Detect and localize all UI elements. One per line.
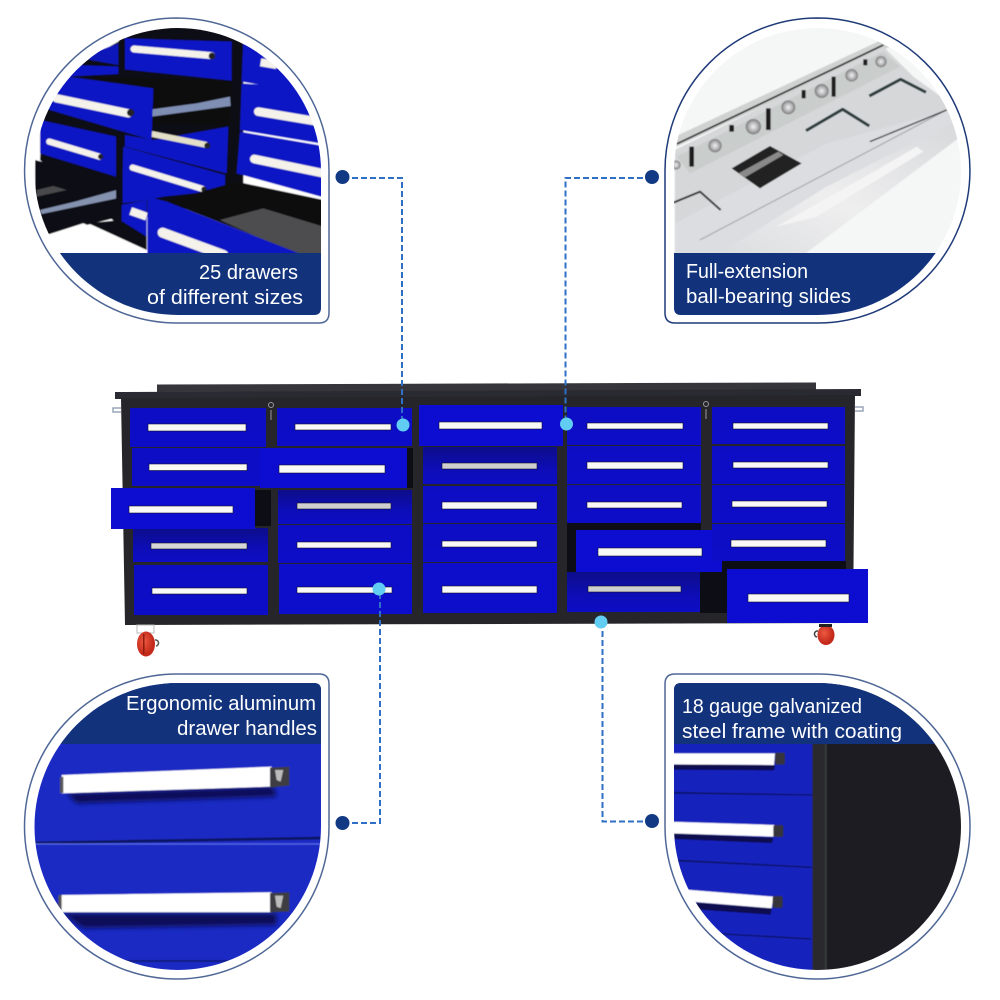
panel: aluminum handles	[24, 674, 330, 979]
caption: 25 drawers of different sizes: 25 drawers	[199, 262, 298, 284]
worktop slab	[115, 389, 861, 399]
drawer column 4	[567, 407, 722, 612]
caster wheel right	[814, 624, 834, 645]
drawer column 1	[111, 408, 268, 615]
connector: drawers callout	[336, 170, 410, 432]
caption: full-extension ball-bearing slides: ball-bearing slides	[686, 286, 851, 308]
caption: 18 gauge galvanized steel frame with coating: 18 gauge galvanized	[682, 696, 862, 718]
panel: ball-bearing slides	[665, 18, 970, 323]
caption: full-extension ball-bearing slides: Full-extension	[686, 261, 808, 283]
caption: ergonomic aluminum drawer handles	[126, 693, 317, 740]
connector: handles callout	[336, 582, 386, 830]
caption: 18 gauge galvanized steel frame with coating	[682, 696, 902, 743]
photo: drawer handles close-up	[30, 678, 330, 978]
caption: 25 drawers of different sizes: of different sizes	[147, 287, 303, 309]
frame body	[121, 395, 855, 625]
banner: slides	[674, 253, 936, 315]
panel outline: frame	[665, 674, 970, 979]
banner: handles	[60, 683, 321, 744]
caption: 25 drawers of different sizes	[147, 262, 303, 309]
photo: metal slide rail	[670, 23, 970, 323]
caption: full-extension ball-bearing slides	[686, 261, 851, 308]
side hooks	[113, 407, 863, 412]
key locks	[268, 402, 708, 420]
worktop back rail	[157, 382, 816, 392]
panel: 25 drawers	[25, 18, 330, 323]
connector: frame callout	[594, 616, 659, 828]
caption: ergonomic aluminum drawer handles: drawer handles	[177, 718, 317, 740]
banner: drawers	[60, 253, 321, 315]
connector: slides callout	[560, 170, 659, 430]
photo: coated steel frame	[670, 678, 973, 978]
panel outline: drawers	[25, 18, 329, 323]
panel: steel frame	[665, 674, 973, 979]
drawer column 3	[419, 405, 563, 613]
caster wheel left	[137, 625, 159, 656]
workbench	[111, 382, 868, 656]
panel outline: handles	[24, 674, 329, 979]
caption: ergonomic aluminum drawer handles: Ergonomic aluminum	[126, 693, 316, 715]
banner: frame	[674, 683, 935, 744]
drawer column 2	[260, 408, 412, 614]
dark openings behind open drawers	[255, 448, 846, 613]
photo: open drawers	[30, 23, 330, 323]
panel outline: slides	[665, 18, 970, 323]
caption: 18 gauge galvanized steel frame with coating: steel frame with coating	[682, 721, 902, 743]
drawer column 5	[712, 407, 868, 623]
